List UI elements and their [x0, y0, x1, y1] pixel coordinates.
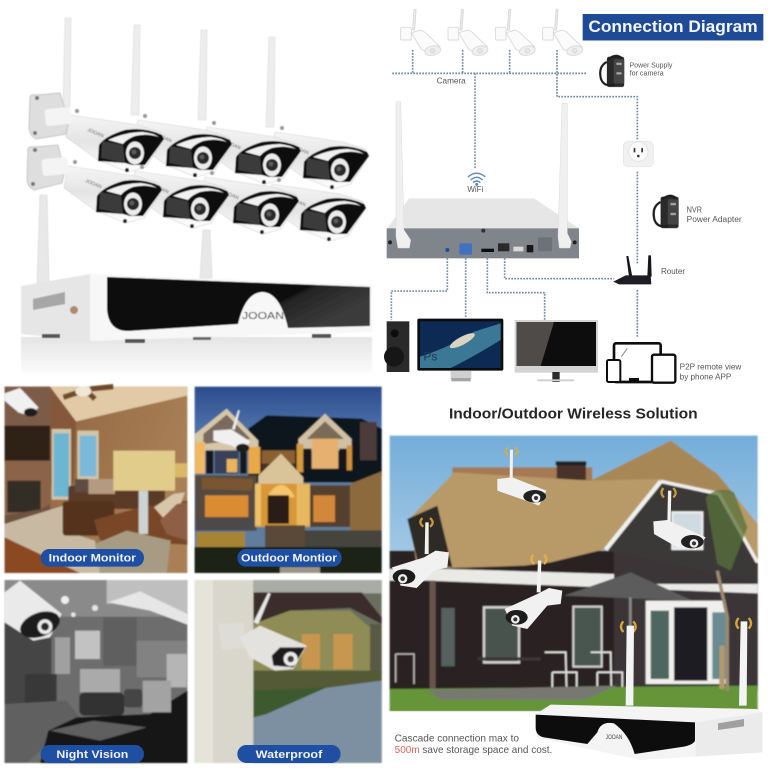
diagram labels: Camera: [437, 76, 466, 86]
NVR recorder: [536, 621, 762, 760]
panel: connection diagram: [384, 9, 763, 383]
TV monitor: [515, 320, 598, 382]
wifi icon: [468, 173, 485, 185]
diagram labels: by phone APP: [680, 371, 732, 381]
diagram labels: for camera: [630, 68, 665, 77]
connection diagram banner: Connection Diagram: [588, 17, 758, 36]
diagram labels: NVR: [687, 204, 702, 214]
brand logo: JOOAN: [242, 311, 284, 322]
panel: night vision: [5, 580, 187, 763]
label pill: Night Vision: [56, 749, 128, 761]
label pill: [41, 745, 144, 763]
speaker icon: [384, 321, 409, 372]
NVR power adapter icon: [654, 196, 679, 228]
wall socket icon: [623, 141, 653, 167]
panel: outdoor monitor: [195, 387, 382, 573]
NVR back view: [387, 198, 579, 258]
label pill: [237, 745, 341, 763]
diagram labels: P2P remote view: [680, 362, 742, 372]
panel: waterproof: [195, 580, 382, 763]
NVR recorder: [21, 274, 372, 343]
NVR rear antennas: [37, 195, 212, 285]
house photo: [390, 436, 758, 711]
section title: Indoor/Outdoor Wireless Solution: [449, 406, 698, 422]
label pill: Waterproof: [256, 749, 323, 761]
reflection floor: [21, 337, 372, 373]
diagram labels: Power Adapter: [687, 214, 742, 224]
desktop monitor: Ps: [423, 350, 437, 364]
NVR antennas: [396, 102, 571, 248]
label pill: [41, 549, 144, 567]
diagram labels: Router: [661, 266, 685, 276]
caption: Cascade connection max to: [395, 733, 519, 744]
label pill: Outdoor Montior: [241, 552, 338, 564]
installed cameras: [392, 447, 751, 632]
desktop monitor: [417, 319, 503, 381]
white area behind recorder: [390, 711, 758, 763]
power supply for camera icon: [600, 56, 624, 87]
router icon: [613, 255, 652, 284]
diagram labels: WiFi: [467, 184, 483, 194]
camera outlines: [401, 9, 583, 57]
upper row cameras: [66, 109, 369, 189]
panel: product kit photo: [21, 18, 372, 373]
dotted connector lines: [391, 50, 637, 337]
tablet and phone icons: [607, 343, 675, 383]
panel: indoor/outdoor wireless solution: [390, 406, 762, 763]
NVR recorder: JOOAN: [606, 735, 622, 741]
label pill: [237, 549, 342, 567]
caption: 500m save storage space and cost.: [395, 745, 552, 756]
camera antennas upper row: [63, 18, 275, 127]
caption: [395, 733, 552, 756]
connection diagram banner: [583, 14, 763, 41]
label pill: Indoor Monitor: [49, 552, 137, 564]
panel: indoor monitor: [5, 386, 187, 573]
diagram labels: Power Supply: [630, 61, 673, 70]
diagram labels: [437, 61, 742, 381]
lower mount bracket: [27, 145, 69, 190]
lower row cameras: [64, 160, 366, 241]
upper mount bracket: [29, 93, 72, 139]
panel: lower-left scenes: [5, 386, 382, 763]
